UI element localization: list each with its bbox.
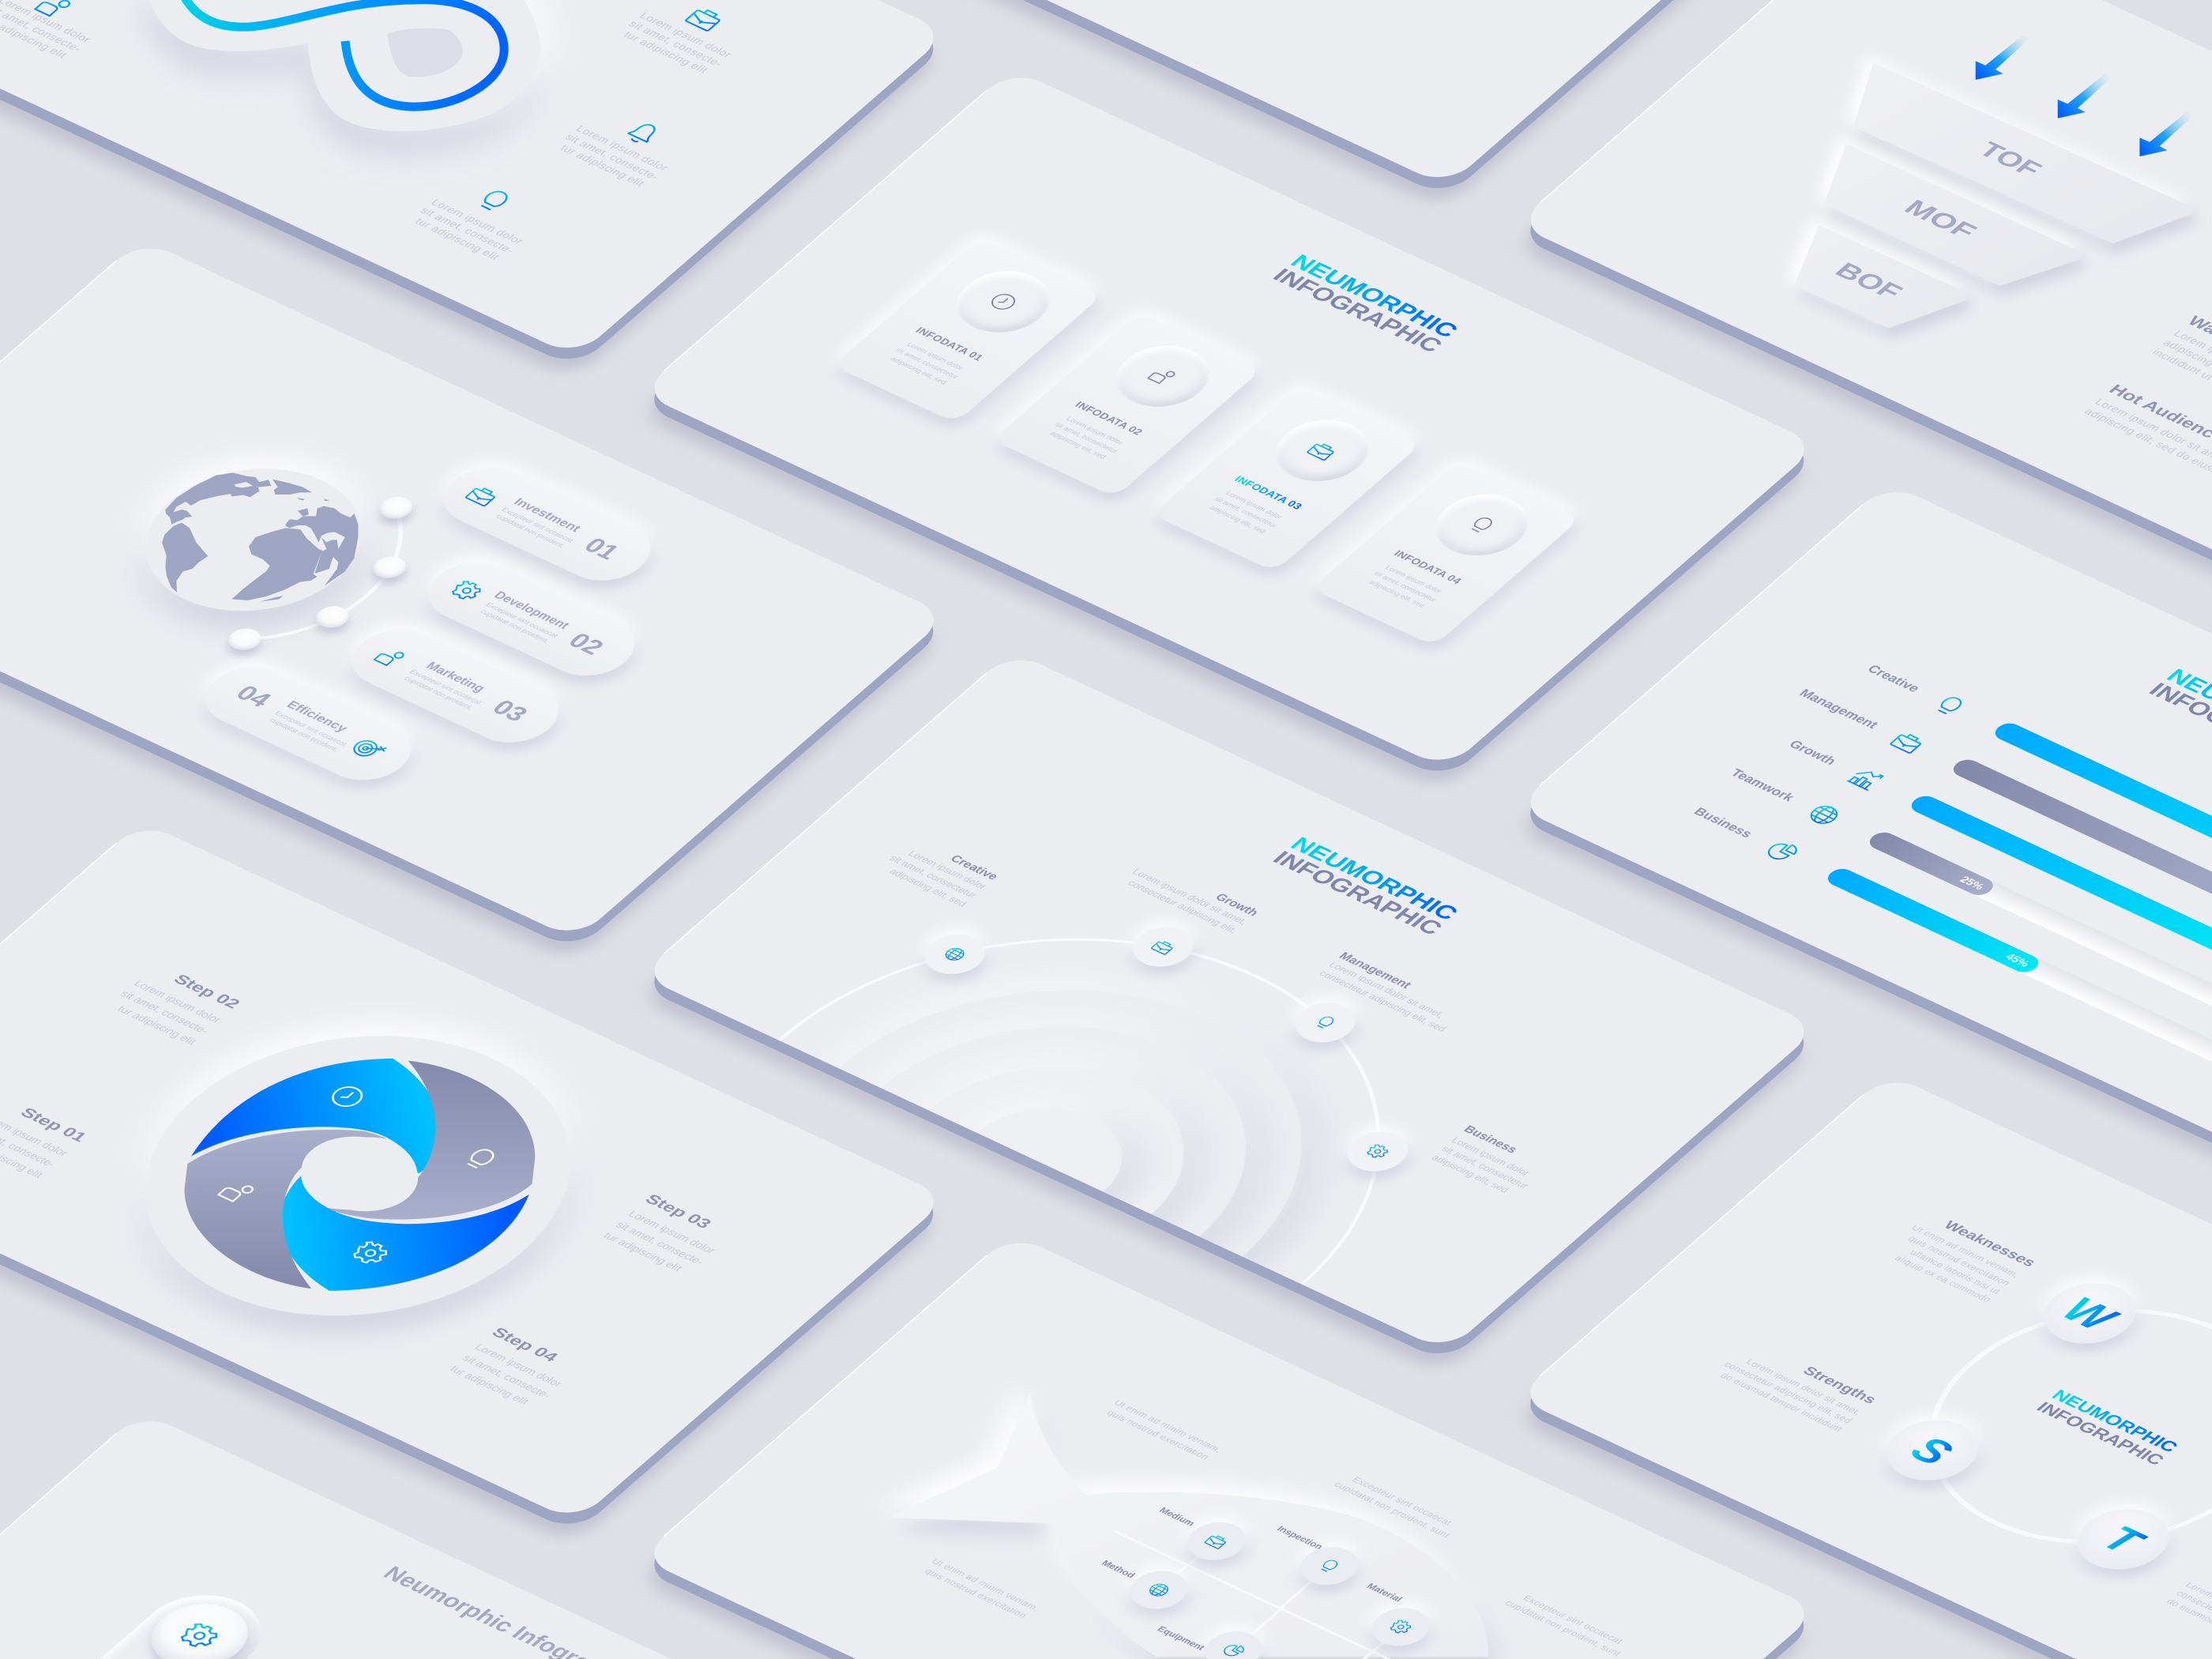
globe disc [102,442,405,638]
swirl base disc [59,982,656,1369]
step 03 text [600,1192,739,1278]
node: material [1330,1582,1447,1653]
panel: knot infographic (top left) [0,0,964,380]
title [1267,833,1465,939]
label: creative: Lorem ipsum dolor [905,849,989,891]
card 02 [992,312,1262,497]
label: business: adipiscing elit, sed [1429,1153,1511,1194]
pill 04 efficiency: Efficiency [284,699,351,735]
text and icons: top left panel: Lorem ipsum dolor [574,123,672,173]
label: business [1429,1123,1555,1199]
node: medium: Medium [1157,1506,1198,1528]
funnel labels and text [1812,135,2212,503]
funnel labels and text: BOF [1829,258,1909,303]
title: NEUMORPHIC [1285,833,1463,924]
text and icons: top left panel: Lorem ipsum dolor [637,10,735,60]
node: method [1083,1548,1199,1616]
node W: W [2052,1289,2129,1340]
label: growth: consectetur adipiscing elit, [1126,878,1240,935]
label: creative: Creative [947,853,1001,882]
step 02 text: Lorem ipsum dolor [131,978,224,1025]
fish text blocks: quis nostrud exercitation [1104,1408,1212,1462]
weaknesses text: ullamco laboris nisi ut [1908,1247,2003,1296]
label: management: Management [1336,950,1414,991]
pill 01 investment: Investment [510,496,585,535]
label: creative: sit amet, consectetur [887,853,979,900]
fish skeleton [1067,1489,1480,1659]
step 01 text [0,1094,90,1180]
funnel labels and text: TOF [1973,137,2048,181]
fish text blocks: Ut enim ad minim veniam, [929,1556,1043,1612]
step 01 text: Step 01 [17,1105,90,1145]
row management [1793,684,2212,981]
card 02: Lorem ipsum dolor [1065,416,1125,446]
node: equipment: Equipment [1155,1624,1207,1652]
node T: T [2093,1518,2156,1563]
title: INFOGRAPHIC [1267,847,1448,939]
step 02 text: Step 02 [170,972,243,1012]
panel: top centre (blank) [621,0,1834,209]
node: business [1335,1124,1420,1179]
card 02: INFODATA 02 [1073,400,1145,437]
weaknesses text: Ut enim ad minim veniam, [1909,1223,2022,1279]
fish text blocks [920,1375,1663,1659]
weaknesses text [1880,1209,2039,1304]
step 02 text: sit amet, consecte- [118,988,213,1036]
panel: concentric arcs [647,660,1805,1368]
row business [1687,803,2212,1091]
node S: S [1901,1429,1963,1473]
strengths text: Strengths [1800,1364,1880,1406]
title: INFOGRAPHIC [2033,1399,2169,1469]
text and icons: top left panel: tur adipiscing elit [412,216,503,261]
panel: bars [1497,483,2212,1206]
step 02 text [105,961,243,1047]
row growth [1783,735,2212,1018]
knot blue line [182,0,504,107]
node: medium [1138,1497,1257,1567]
card 03: INFODATA 03 [1232,474,1304,511]
node W [2026,1272,2154,1355]
row growth: Growth [1786,738,1839,767]
text and icons: top left panel: Lorem ipsum dolor [428,197,527,246]
pill 01 investment [427,457,668,592]
pill 01 investment: Excepteur sint occaecat [500,506,576,544]
card 04: sit amet, consectetur [1372,570,1439,604]
step 04 text [447,1325,585,1411]
orbit arc [245,508,442,661]
row teamwork: Teamwork [1728,766,1798,804]
fish text blocks: Excepteur sint occaecat [1350,1475,1455,1527]
pill 03 marketing: cupidatat non proident, [403,675,475,711]
row creative: Creative [1864,663,1923,694]
label: management: consectetur adipiscing elit, sed [1317,969,1449,1033]
text and icons: top left panel: sit amet, consecte- [562,132,663,182]
card 01 [833,238,1103,423]
step 03 text: tur adipiscing elit [600,1230,686,1273]
ring [1860,1266,2212,1586]
title: NEUMORPHIC [2048,1386,2182,1455]
fish text blocks: cupidatat non proident, sunt [1332,1480,1453,1540]
card 03 [1152,386,1421,572]
card 01: sit amet, consectetur [893,347,960,380]
track and ball with gear [0,1580,286,1659]
pill 01 investment: 01 [578,533,626,564]
card 02: sit amet, consectetur [1053,421,1119,454]
row teamwork: 25% [1958,874,1988,892]
step 03 text: Lorem ipsum dolor [626,1209,719,1255]
weaknesses text: aliquip ex ea commodo [1892,1254,1994,1304]
step 03 text: Step 03 [641,1192,715,1232]
row teamwork [1725,764,2212,1055]
label: business: Lorem ipsum dolor [1449,1135,1533,1178]
text and icons: top left panel: tur adipiscing elit [621,29,711,75]
node S [1868,1409,1997,1492]
card 03: sit amet, consectetur [1213,495,1279,529]
text and icons: top left panel: sit amet, consecte- [626,18,726,69]
step 04 text: sit amet, consecte- [460,1352,555,1401]
knot hole [387,28,463,77]
strengths text: consectetur adipiscing elit, sed [1721,1360,1855,1425]
node balls [222,493,459,673]
step 04 text: tur adipiscing elit [447,1364,532,1407]
weaknesses text: quis nostrud exercitation [1905,1234,2013,1288]
label: creative: adipiscing elit, sed [886,867,969,908]
fish text blocks: Excepteur sint occaecat [1521,1593,1626,1646]
title: INFOGRAPHIC [1267,265,1448,356]
text and icons: top left panel: sit amet, consecte- [418,205,517,255]
node: material: Material [1364,1582,1405,1604]
label: management [1317,950,1469,1033]
panel: SWOT [1497,1074,2212,1659]
pill 03 marketing: 03 [487,695,534,726]
pill 01 investment: cupidatat non proident, [495,513,566,549]
pill 03 marketing: Marketing [423,660,488,694]
label: creative [877,834,1001,908]
node: creative [912,927,997,982]
title [1267,250,1465,356]
node: management [1283,995,1367,1050]
strengths text: do eiusmod tempor incididunt [1718,1371,1845,1434]
node T [2059,1498,2188,1581]
pill 03 marketing: Excepteur sint occaecat [408,668,483,706]
node: inspection: Inspection [1274,1524,1326,1551]
node: growth [1121,920,1206,974]
row creative [1861,660,2212,945]
pill 03 marketing [335,619,576,754]
pill 04 efficiency [187,656,429,791]
swirl icons [218,1083,501,1266]
title [2033,1386,2183,1469]
pill 02 development: cupidatat non proident, [479,608,551,645]
row management: Management [1796,687,1882,731]
pill 02 development: Development [491,589,573,631]
pill 02 development [411,551,652,687]
fish text blocks: cupidatat non proident, sunt [1503,1598,1624,1658]
row business: Business [1691,805,1756,840]
pill 04 efficiency: 04 [230,681,277,712]
panel: fishbone [621,1234,1834,1659]
fish body [889,1394,1488,1657]
label: business: sit amet, consectetur [1439,1144,1531,1191]
card 04 [1311,461,1581,646]
arrows [1976,36,2195,156]
panel: swirl [0,822,964,1545]
funnel segments [1799,68,2190,324]
fish text blocks: Ut enim ad minim veniam, [1112,1398,1224,1454]
step 03 text: sit amet, consecte- [613,1219,708,1267]
node: equipment [1150,1604,1274,1659]
text and icons: top left panel: tur adipiscing elit [558,142,648,188]
strengths text: Lorem ipsum dolor sit amet, [1744,1357,1864,1417]
card 04: Lorem ipsum dolor [1383,564,1443,595]
panel: bottom left [0,1412,964,1659]
text and icons: top left panel [0,0,801,283]
label: growth: Growth [1212,892,1261,919]
weaknesses text: Weaknesses [1941,1218,2039,1269]
label: business: Business [1461,1123,1520,1156]
strengths text [1712,1337,1880,1434]
row business: 45% [2003,951,2033,969]
title: NEUMORPHIC [1285,250,1463,342]
pill 04 efficiency: cupidatat non proident, [268,717,340,753]
pill 04 efficiency: Excepteur sint occaecat [273,710,349,747]
step 04 text: Step 04 [487,1325,562,1365]
label: management: Lorem ipsum dolor sit amet, [1326,960,1446,1019]
pill 02 development: Excepteur sint occaecat [484,601,560,639]
swirl blades [184,1059,535,1291]
card 01: Lorem ipsum dolor [905,341,965,371]
knot band [145,0,540,131]
funnel labels and text: MOF [1898,195,1983,243]
card 03: adipiscing elit, sed [1208,504,1267,535]
card 01: INFODATA 01 [913,325,986,363]
globe continents [162,472,358,602]
panel: globe and pills [0,239,964,963]
fish text blocks: quis nostrud exercitation [922,1567,1029,1620]
step 02 text: tur adipiscing elit [115,1003,200,1047]
label: growth: Lorem ipsum dolor sit amet, [1130,867,1250,927]
step 04 text: Lorem ipsum dolor [472,1341,566,1389]
node: inspection [1250,1522,1370,1592]
card 04: INFODATA 04 [1391,548,1465,586]
panel: four info cards [621,68,1834,792]
panel: funnel [1497,0,2212,624]
label: growth [1120,857,1261,935]
node: method: Method [1099,1559,1138,1580]
concentric discs [777,939,1379,1285]
card 01: adipiscing elit, sed [889,356,949,386]
card 04: adipiscing elit, sed [1367,579,1427,609]
card 02: adipiscing elit, sed [1048,430,1108,460]
pill 02 development: 02 [562,628,610,659]
card 03: Lorem ipsum dolor [1224,490,1285,520]
